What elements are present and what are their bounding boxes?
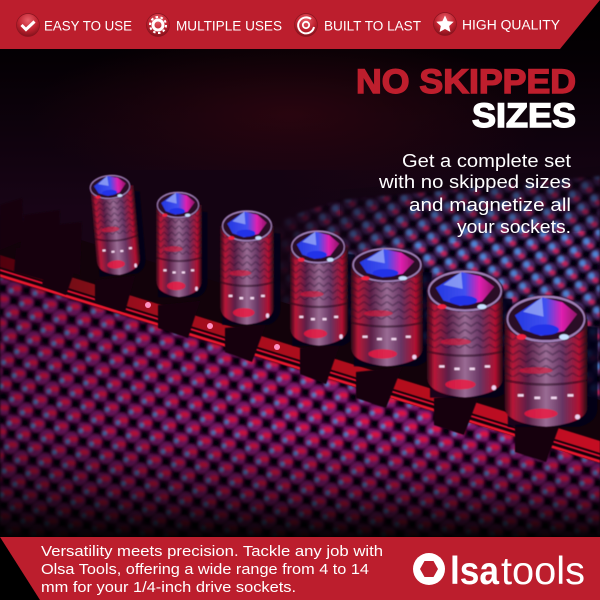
- lower mat: [0, 270, 600, 539]
- socket 6: [426, 270, 512, 398]
- banner text: mm for your 1/4-inch drive sockets.: [41, 580, 296, 596]
- heading: NO SKIPPED: [356, 63, 576, 101]
- description text: Get a complete set: [402, 151, 571, 171]
- upper mat: [110, 166, 600, 480]
- top banner: [0, 0, 600, 49]
- socket 5: [351, 247, 432, 366]
- logo: tools: [501, 550, 585, 593]
- socket 3: [220, 210, 280, 325]
- description text: [378, 151, 571, 237]
- sockets: [88, 173, 597, 427]
- description text: with no skipped sizes: [378, 172, 571, 192]
- label: high quality: HIGH QUALITY: [462, 18, 560, 32]
- socket 7: [504, 295, 597, 427]
- description text: and magnetize all: [409, 195, 571, 215]
- bottom banner: [0, 537, 600, 600]
- rail clips: [0, 198, 562, 462]
- logo: lsa: [450, 550, 499, 593]
- socket 2: [156, 191, 208, 297]
- icon: star: [434, 12, 456, 36]
- heading: [356, 63, 576, 135]
- magnetic rail: [0, 215, 600, 463]
- label: easy to use: EASY TO USE: [44, 18, 132, 34]
- logo: [413, 550, 585, 593]
- icon: gear: [146, 14, 170, 36]
- banner text: Versatility meets precision. Tackle any job with: [41, 544, 383, 560]
- logo: O: [415, 550, 443, 593]
- icon: check: [16, 14, 40, 36]
- description text: your sockets.: [457, 217, 571, 237]
- socket 4: [290, 230, 355, 346]
- banner text: [41, 544, 383, 596]
- socket 1: [88, 173, 147, 277]
- icon: durability arrow: [294, 14, 318, 36]
- label: built to last: BUILT TO LAST: [324, 18, 421, 34]
- heading: SIZES: [472, 97, 576, 135]
- banner text: Olsa Tools, offering a wide range from 4 to 14: [41, 562, 369, 578]
- label: multiple uses: MULTIPLE USES: [176, 18, 282, 34]
